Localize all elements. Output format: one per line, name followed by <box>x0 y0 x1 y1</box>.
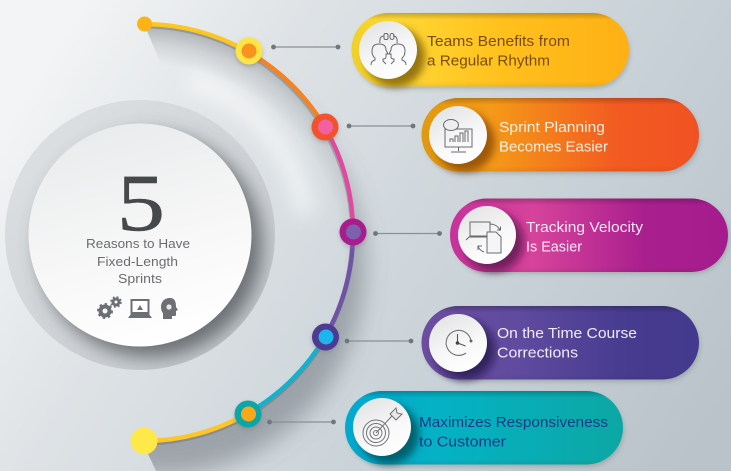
arc shadow line <box>144 26 352 443</box>
central badge <box>5 100 275 370</box>
badge caption: Sprints <box>118 271 163 286</box>
connector 5 <box>267 420 336 424</box>
segment: yellow top <box>144 24 248 52</box>
label <box>497 325 637 362</box>
label: Tracking Velocity <box>526 219 644 236</box>
badge caption: Reasons to Have <box>86 236 190 251</box>
segment: orange <box>248 52 325 128</box>
label: to Customer <box>419 434 506 450</box>
icon: target and arrow <box>353 398 411 456</box>
segment: yellow bottom <box>144 413 248 441</box>
icon: laptop and document <box>458 206 516 264</box>
end point <box>130 428 158 454</box>
label: Teams Benefits from <box>427 33 570 50</box>
panel: teams benefit <box>352 13 630 89</box>
node 4 <box>312 324 339 352</box>
connector 4 <box>345 339 413 343</box>
panel: tracking velocity <box>450 198 729 274</box>
panel: sprint planning <box>422 98 700 174</box>
node 3 <box>340 218 366 248</box>
label: Maximizes Responsiveness <box>419 414 608 431</box>
segment: purple <box>325 232 353 337</box>
timeline arc <box>144 24 353 443</box>
label: Sprint Planning <box>499 119 605 136</box>
arc shadow <box>147 26 376 471</box>
badge caption: Fixed-Length <box>97 254 178 269</box>
icon: gears <box>98 297 121 318</box>
connector 3 <box>373 231 442 236</box>
icon disc shadow <box>464 212 524 272</box>
start point <box>137 16 152 32</box>
icon disc shadow <box>359 404 419 464</box>
main disc <box>28 124 252 346</box>
panel: course corrections <box>422 306 700 382</box>
label <box>427 33 570 70</box>
connector 1 <box>271 45 340 49</box>
label: Becomes Easier <box>499 138 608 156</box>
icon disc shadow <box>435 320 495 380</box>
icon: two heads and plug <box>359 21 417 79</box>
icon: clock <box>429 314 487 372</box>
outer ring <box>5 100 275 370</box>
icon: laptop <box>128 300 152 318</box>
icon: monitor chart and speech bubble <box>429 106 487 164</box>
icon disc shadow <box>435 112 495 172</box>
node 5 <box>234 400 262 430</box>
label: Is Easier <box>526 238 582 256</box>
label: On the Time Course <box>497 325 637 342</box>
label: a Regular Rhythm <box>427 52 550 70</box>
segment: pink <box>325 128 353 232</box>
label <box>499 119 608 156</box>
label <box>419 414 608 450</box>
label <box>526 219 644 256</box>
label: Corrections <box>497 344 578 362</box>
segment: blue <box>248 337 325 413</box>
panel: responsiveness <box>345 391 624 467</box>
node 2 <box>312 114 338 142</box>
node 1 <box>236 38 262 66</box>
icon: head with bulb <box>161 298 178 319</box>
connector 2 <box>347 124 415 128</box>
icon disc shadow <box>365 27 425 87</box>
badge caption <box>86 236 190 286</box>
number 5: 5 <box>117 158 165 248</box>
